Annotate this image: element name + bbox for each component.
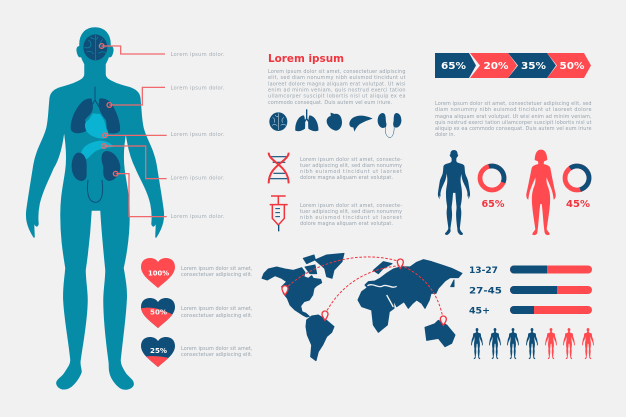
callout labels: Lorem ipsum dolor. [170, 86, 225, 92]
heart 50%: 50% [150, 308, 167, 316]
inland seas [367, 285, 397, 307]
arrow percentage strip [435, 53, 591, 78]
callout labels: Lorem ipsum dolor. [170, 52, 225, 58]
icon: kidneys [378, 113, 401, 138]
callout labels [170, 52, 225, 220]
heart 25% text [181, 346, 253, 358]
age 13-27: 13-27 [469, 266, 498, 276]
right paragraph: magna aliquam erat volutpat. Ut wisi enim ad minim veniam, [435, 114, 592, 120]
human body anatomy figure [27, 28, 163, 389]
callout labels: Lorem ipsum dolor. [170, 214, 225, 220]
icon: liver [349, 116, 373, 132]
arrow percentage strip: 20% [484, 61, 509, 72]
right paragraph: aliquip ex ea commodo consequat. Duis autem vel eum iriure [435, 126, 592, 132]
bladder [87, 180, 103, 202]
male percent: 65% [482, 199, 505, 210]
organ icons row [269, 109, 401, 138]
icon: heart [327, 113, 342, 131]
male donut [477, 163, 507, 193]
heading: Lorem ipsum [268, 53, 344, 65]
heart 100%: 100% [148, 270, 169, 278]
age 45+: 45+ [469, 306, 490, 316]
location pins [282, 259, 446, 325]
female percent: 45% [566, 199, 590, 210]
heart 100% [141, 258, 175, 288]
arrow percentage strip: 35% [521, 61, 547, 72]
icon: syringe [270, 196, 288, 231]
dna paragraph: dolore magna aliquam erat volutpat. [300, 175, 393, 181]
continents [262, 253, 462, 361]
brain [83, 34, 107, 60]
heart 25% [141, 337, 175, 367]
right paragraph: Lorem ipsum dolor sit amet, consectetuer adipiscing elit, sed [435, 101, 592, 107]
female donut [560, 161, 594, 195]
right paragraph: diam nonummy nibh euismod tincidunt ut laoreet dolore [435, 107, 592, 113]
intro paragraph: commodo consequat. Duis autem vel eum iriure. [268, 100, 392, 106]
heart 50% text: consectetuer adipiscing elit. [181, 313, 253, 319]
arrow percentage strip: 50% [560, 61, 585, 72]
intro paragraph [268, 69, 406, 106]
dna paragraph: nibh euismod tincidunt ut laoreet [300, 169, 402, 175]
heart 25% text: Lorem ipsum dolor sit amet, [181, 346, 253, 352]
heart 50% [141, 298, 175, 328]
world map [262, 253, 462, 361]
syringe paragraph: dolore magna aliquam erat volutpat. [300, 221, 393, 227]
icon: lungs [295, 109, 318, 131]
age bars [469, 266, 592, 316]
callout labels: Lorem ipsum dolor. [170, 132, 225, 138]
icon: DNA [269, 153, 289, 183]
heart 25% text: consectetuer adipiscing elit. [181, 352, 253, 358]
icon: brain [269, 112, 287, 131]
intro paragraph: enim ad minim veniam, quis nostrud exerci tation [268, 87, 406, 93]
heart 50% text: Lorem ipsum dolor sit amet, [181, 306, 253, 312]
intro paragraph: Lorem ipsum dolor sit amet, consectetuer adipiscing [268, 69, 406, 75]
syringe paragraph: Lorem ipsum dolor sit amet, consecte- [300, 203, 402, 209]
heart 100% text: consectetuer adipiscing elit. [181, 272, 253, 278]
arrow percentage strip: 65% [441, 61, 467, 72]
syringe paragraph: tuer adipiscing elit, sed diam nonummy [300, 209, 402, 215]
female figure [526, 150, 556, 235]
right paragraph [435, 101, 592, 138]
dna paragraph [300, 157, 402, 181]
people row [471, 328, 594, 359]
syringe paragraph [300, 203, 402, 227]
heart 50% text [181, 306, 253, 319]
intro paragraph: elit, sed diam nonummy nibh euismod tincidunt ut [268, 75, 406, 81]
lungs [71, 98, 120, 133]
heart organ [85, 113, 108, 139]
syringe paragraph: nibh euismod tincidunt ut laoreet [300, 215, 402, 221]
heart 100% text [181, 266, 253, 278]
male figure [438, 150, 470, 235]
route arcs [285, 257, 443, 320]
right paragraph: dolor in. [435, 132, 455, 138]
trachea [91, 87, 99, 107]
callout labels: Lorem ipsum dolor. [170, 176, 225, 182]
age 27-45: 27-45 [469, 286, 502, 296]
intro paragraph: laoreet dolore magna aliquam erat volutpat. Ut wisi [268, 81, 406, 87]
heart 100% text: Lorem ipsum dolor sit amet, [181, 266, 253, 272]
kidneys [72, 151, 120, 181]
right paragraph: quis nostrud exerci tation ullamcorper suscipit lobortis nisl ut [435, 120, 592, 126]
heart 25%: 25% [150, 347, 167, 355]
callout lines [99, 44, 167, 217]
intro paragraph: ullamcorper suscipit lobortis nisl ut aliquip ex ea [268, 94, 406, 100]
liver [81, 141, 114, 159]
dna paragraph: Lorem ipsum dolor sit amet, consecte- [300, 157, 402, 163]
dna paragraph: tuer adipiscing elit, sed diam nonummy [300, 163, 402, 169]
